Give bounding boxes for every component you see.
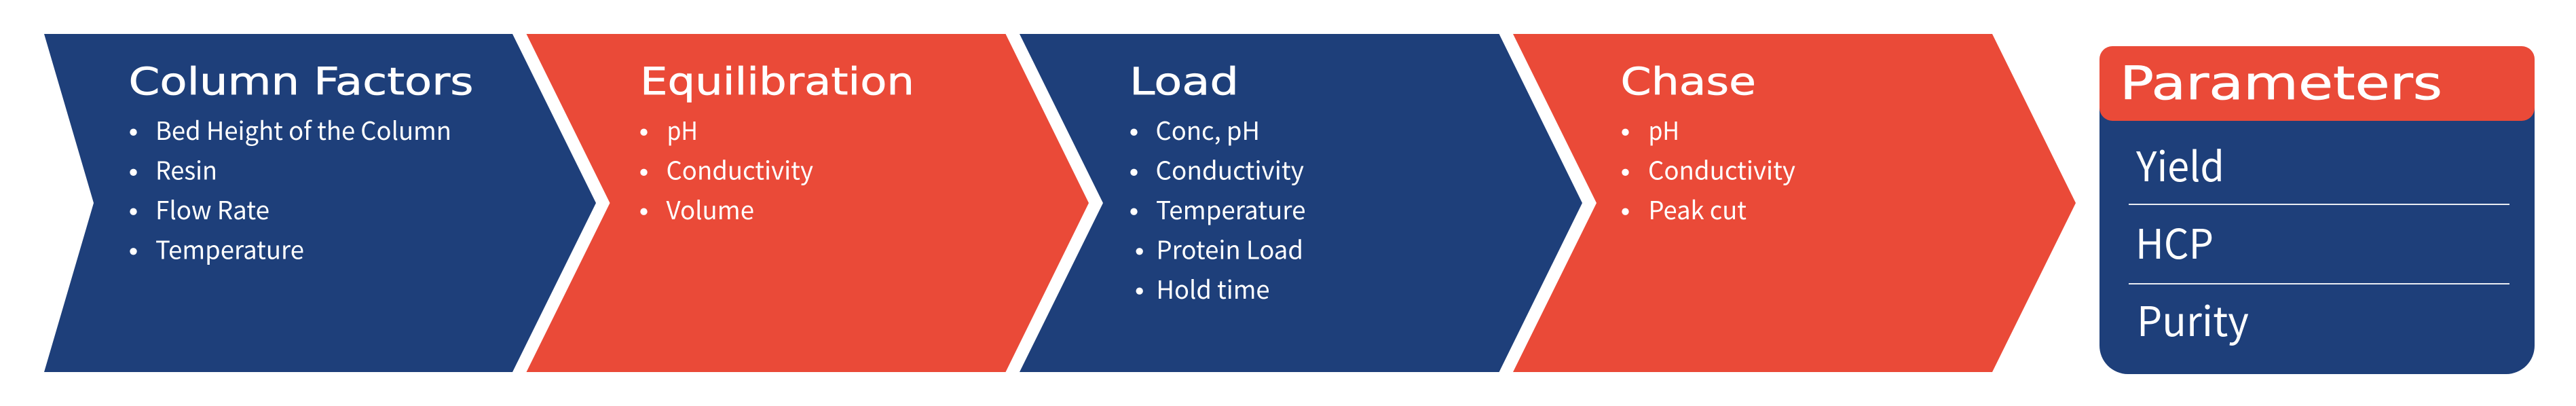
list: load [1130,111,1306,306]
parameter: HCP: HCP [2135,212,2214,271]
list: chase [1622,111,1795,227]
list: column factors: Flow Rate [155,191,269,227]
list: column factors: Resin [155,151,217,187]
list: chase: Peak cut [1648,191,1747,227]
heading: load: Load [1130,60,1239,103]
list: load: Protein Load [1157,231,1303,266]
header: parameters: Parameters [2120,57,2442,111]
list: load: Temperature [1156,191,1306,227]
list: load: Conductivity [1155,151,1304,187]
list: column factors: Bed Height of the Column [155,111,451,147]
header: parameters [2099,46,2535,121]
parameter: purity: Purity [2137,289,2249,348]
panel: column factors chevron [44,34,596,372]
list: load: Hold time [1157,270,1269,306]
panel: chase chevron [1513,34,2076,372]
panel: load chevron [1020,34,1582,372]
list: chase: Conductivity [1648,151,1795,187]
panel: parameters [2099,46,2535,374]
list: column factors: Temperature [155,231,304,266]
list: equilibration: Conductivity [667,151,813,187]
heading: equilibration: Equilibration [640,60,914,103]
heading: column factors: Column Factors [129,60,474,103]
parameter: yield: Yield [2135,134,2224,193]
heading: chase: Chase [1621,60,1756,103]
panel: equilibration chevron [527,34,1089,372]
list: equilibration: pH [667,111,698,147]
list: equilibration [640,111,813,227]
list: load: Conc, pH [1155,111,1260,147]
list: equilibration: Volume [667,191,754,227]
list: column factors [130,111,451,266]
list: chase: pH [1648,111,1679,147]
